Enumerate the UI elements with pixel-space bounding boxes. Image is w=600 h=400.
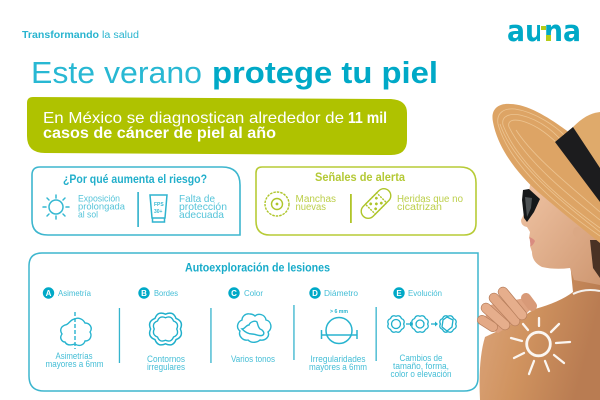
column E <box>388 287 456 379</box>
spots text: Manchas <box>296 194 336 205</box>
column B: B <box>141 289 147 298</box>
column E: E <box>396 289 402 298</box>
column C: Color <box>244 288 263 298</box>
divider <box>210 308 212 363</box>
column D: D <box>312 289 318 298</box>
icon: spots <box>265 192 289 216</box>
column B: Bordes <box>154 288 178 298</box>
photo: woman with hat <box>480 104 600 400</box>
bikini strap <box>573 290 600 294</box>
icon: color <box>238 314 271 342</box>
banner <box>27 97 407 155</box>
icon: sunscreen tube: 30+ <box>154 209 163 215</box>
protection text <box>179 193 227 221</box>
column A: Asimetría <box>58 288 91 298</box>
hand <box>482 292 532 333</box>
exposure text: al sol <box>78 210 98 220</box>
face <box>521 180 600 285</box>
icon: borders <box>150 313 181 345</box>
column D: mayores a 6mm <box>309 362 367 372</box>
icon: sun <box>43 195 69 219</box>
protection text: Falta de <box>179 193 215 205</box>
divider <box>119 308 120 363</box>
column B <box>138 287 185 372</box>
spots text <box>296 194 336 213</box>
tagline: Transformando <box>22 30 99 41</box>
column E: Cambios de <box>400 353 442 363</box>
sunglasses <box>522 189 540 222</box>
column E: color o elevación <box>390 369 452 379</box>
ear <box>573 227 581 237</box>
icon: diameter: > 6 mm <box>330 309 349 315</box>
logo: auna <box>507 14 581 48</box>
icon: bandage <box>358 186 394 221</box>
panel: self-exam <box>29 253 478 391</box>
tagline <box>22 30 139 41</box>
icon: sunscreen tube <box>150 195 167 222</box>
icon: sunscreen tube: FPS <box>154 202 164 208</box>
column E: tamaño, forma, <box>393 361 449 371</box>
exposure text: prolongada <box>78 202 126 212</box>
banner: 11 mil <box>348 110 387 127</box>
column D: Diámetro <box>324 288 358 298</box>
wounds text: Heridas que no <box>397 194 463 205</box>
divider <box>137 192 139 227</box>
column B: irregulares <box>147 362 185 372</box>
hat texture <box>498 109 600 236</box>
risk heading: ¿Por qué aumenta el riesgo? <box>63 174 207 186</box>
banner: casos de cáncer de piel al año <box>43 125 276 142</box>
title: Este verano <box>31 55 202 90</box>
divider <box>350 194 352 223</box>
title: protege tu piel <box>212 55 438 90</box>
panel: risk <box>32 167 240 235</box>
spots text: nuevas <box>296 202 326 213</box>
body <box>480 262 600 400</box>
wounds text: cicatrizan <box>397 202 442 213</box>
panel: alert signs <box>256 167 476 235</box>
column B: Contornos <box>147 354 185 364</box>
icon: asymmetry <box>61 312 91 349</box>
column A: Asimetrías <box>56 351 93 361</box>
hat crown <box>573 112 600 172</box>
tagline: la salud <box>102 30 139 41</box>
column C: C <box>231 289 237 298</box>
sun of sunscreen <box>511 318 570 374</box>
column C: Varios tonos <box>231 354 275 364</box>
lips <box>530 237 535 246</box>
hair <box>590 240 600 278</box>
column D <box>309 287 367 372</box>
hat brim <box>492 104 600 243</box>
column E: Evolución <box>408 288 442 298</box>
divider <box>376 307 377 361</box>
self-exam heading: Autoexploración de lesiones <box>185 262 330 274</box>
protection text: protección <box>179 201 227 213</box>
protection text: adecuada <box>179 209 224 221</box>
icon: evolution <box>388 316 456 332</box>
alert heading: Señales de alerta <box>315 172 406 184</box>
column A: mayores a 6mm <box>46 359 104 369</box>
divider <box>293 305 295 360</box>
hat band <box>555 127 600 202</box>
column A: A <box>46 289 52 298</box>
banner: En México se diagnostican alrededor de <box>43 110 344 127</box>
exposure text: Exposición <box>78 194 120 204</box>
column A <box>43 287 104 369</box>
column D: Irregularidades <box>310 354 366 364</box>
exposure text <box>78 194 126 220</box>
wounds text <box>397 194 463 213</box>
column C <box>228 287 275 364</box>
